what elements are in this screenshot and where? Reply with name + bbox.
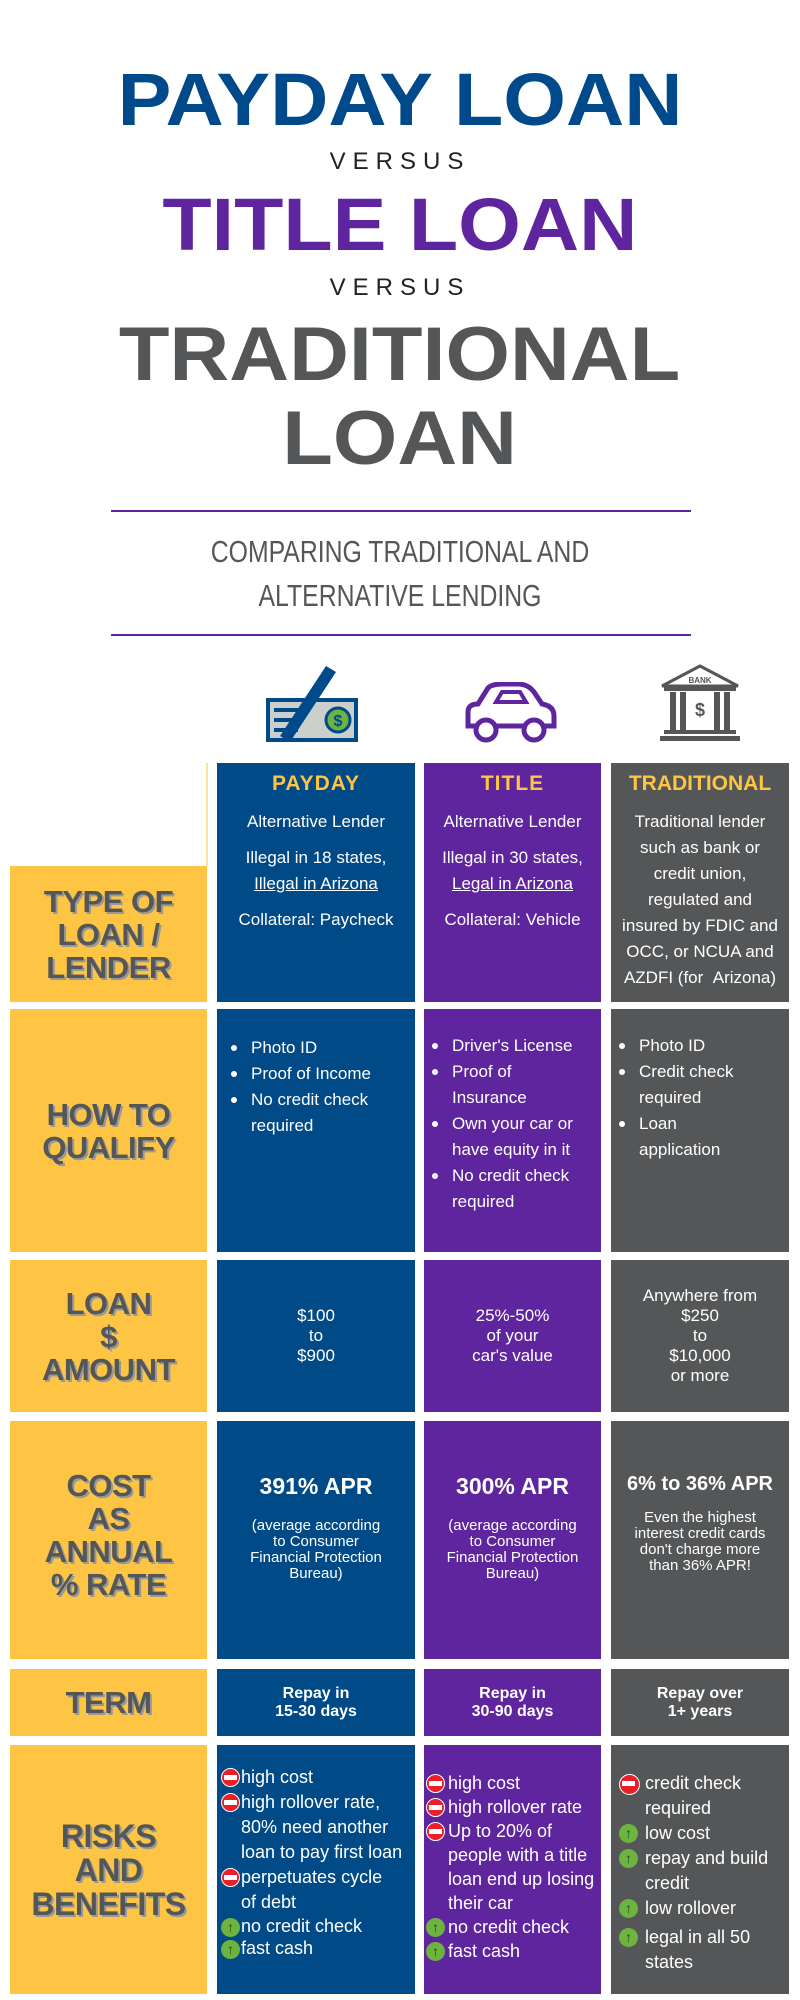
row label: loan amount: $ xyxy=(100,1318,117,1354)
panel: traditional term: 1+ years xyxy=(668,1702,732,1720)
panel: payday type: PAYDAY xyxy=(272,772,360,795)
row label: how to qualify: QUALIFY xyxy=(42,1130,175,1164)
row label: how to qualify: HOW TO xyxy=(47,1096,170,1132)
panel: traditional qualify: application xyxy=(639,1140,720,1159)
panel: payday cost: to Consumer xyxy=(273,1533,359,1550)
panel: title cost xyxy=(424,1421,601,1659)
panel: traditional qualify: required xyxy=(639,1088,701,1107)
panel: payday cost: Financial Protection xyxy=(250,1549,382,1566)
panel: traditional risks: repay and build xyxy=(645,1848,768,1868)
panel: traditional risks: ↑ xyxy=(625,1929,632,1945)
panel: traditional cost: than 36% APR! xyxy=(649,1557,751,1574)
panel: traditional risks: credit xyxy=(645,1873,689,1893)
panel: title type: Illegal in 30 states, xyxy=(442,848,583,867)
panel: payday qualify: required xyxy=(251,1116,313,1135)
panel: payday cost: Bureau) xyxy=(289,1565,343,1582)
panel: payday amount: $100 xyxy=(297,1306,335,1325)
panel: payday risks xyxy=(217,1745,415,1994)
panel: title risks: loan end up losing xyxy=(448,1869,594,1889)
panel: traditional type: regulated and xyxy=(648,890,752,909)
panel: title qualify: Insurance xyxy=(452,1088,527,1107)
panel: title type: TITLE xyxy=(481,772,544,795)
panel: payday amount: $900 xyxy=(297,1346,335,1365)
panel: traditional cost xyxy=(611,1421,789,1659)
panel: traditional type: AZDFI (for Arizona) xyxy=(624,968,776,987)
panel: title qualify: Proof of xyxy=(452,1062,512,1081)
panel: payday risks: no credit check xyxy=(241,1916,362,1936)
versus 1: VERSUS xyxy=(330,148,470,175)
panel: title amount: 25%-50% xyxy=(476,1306,549,1325)
panel: payday cost: (average according xyxy=(252,1517,380,1534)
panel: title risks: high cost xyxy=(448,1773,520,1793)
panel: title cost: (average according xyxy=(448,1517,577,1534)
panel: payday amount xyxy=(217,1260,415,1412)
panel: traditional qualify: Photo ID xyxy=(639,1036,705,1055)
panel: title risks: no credit check xyxy=(448,1917,569,1937)
panel: payday risks: high cost xyxy=(241,1767,313,1787)
icon: check and pen xyxy=(266,666,358,742)
panel: payday type: Illegal in Arizona xyxy=(254,874,378,893)
panel: payday risks: of debt xyxy=(241,1892,296,1912)
panel: payday risks: ↑ xyxy=(227,1941,234,1957)
panel: traditional type: such as bank or xyxy=(640,838,760,857)
panel: payday term: 15-30 days xyxy=(275,1702,357,1720)
panel: payday qualify: Proof of Income xyxy=(251,1064,371,1083)
row label: loan amount: AMOUNT xyxy=(42,1352,175,1386)
panel: title cost: Financial Protection xyxy=(447,1549,578,1566)
title: traditional loan xyxy=(119,312,681,481)
panel: title type: Legal in Arizona xyxy=(452,874,573,893)
panel: payday type: Illegal in 18 states, xyxy=(246,848,386,867)
title: payday loan: PAYDAY LOAN xyxy=(118,58,682,141)
row label: cost: AS xyxy=(87,1501,130,1536)
panel: traditional risks: required xyxy=(645,1798,711,1818)
panel: traditional type xyxy=(611,763,789,1002)
panel: payday risks: loan to pay first loan xyxy=(241,1842,402,1862)
row label: risks and benefits: AND xyxy=(75,1852,142,1888)
panel: traditional amount: or more xyxy=(671,1366,729,1385)
row label: term xyxy=(10,1669,207,1736)
subtitle: ALTERNATIVE LENDING xyxy=(259,578,541,613)
row label: cost: COST xyxy=(66,1468,151,1503)
row label: type of loan: TYPE OF xyxy=(44,884,173,918)
panel: title risks: high rollover rate xyxy=(448,1797,582,1817)
panel: title amount xyxy=(424,1260,601,1412)
panel: payday term xyxy=(217,1669,415,1736)
subtitle xyxy=(211,534,589,613)
panel: payday type: Alternative Lender xyxy=(247,812,385,831)
panel: traditional qualify: Loan xyxy=(639,1114,677,1133)
panel: title cost: 300% APR xyxy=(456,1473,569,1499)
row label: loan amount xyxy=(10,1260,207,1412)
panel: traditional type: insured by FDIC and xyxy=(622,916,778,935)
panel: title risks: their car xyxy=(448,1893,513,1913)
panel: traditional term: Repay over xyxy=(657,1684,743,1702)
panel: title term: 30-90 days xyxy=(472,1702,553,1720)
icon: bank xyxy=(660,664,740,741)
panel: traditional risks: states xyxy=(645,1952,693,1972)
panel: traditional risks: legal in all 50 xyxy=(645,1927,750,1947)
panel: title risks: Up to 20% of xyxy=(448,1821,552,1841)
panel: traditional risks: ↑ xyxy=(625,1825,632,1841)
panel: title qualify: Own your car or xyxy=(452,1114,573,1133)
panel: title risks: fast cash xyxy=(448,1941,520,1961)
title: traditional loan: LOAN xyxy=(283,396,517,481)
panel: traditional cost: interest credit cards xyxy=(635,1525,765,1542)
panel: traditional cost: Even the highest xyxy=(644,1509,756,1526)
panel: traditional type: OCC, or NCUA and xyxy=(626,942,774,961)
panel: title qualify: required xyxy=(452,1192,514,1211)
panel: traditional type: TRADITIONAL xyxy=(629,772,771,795)
panel: title type: Collateral: Vehicle xyxy=(444,910,581,929)
icon: bank: BANK xyxy=(688,676,712,685)
panel: traditional amount: $250 xyxy=(681,1306,719,1325)
panel: payday type: Collateral: Paycheck xyxy=(239,910,393,929)
subtitle: COMPARING TRADITIONAL AND xyxy=(211,534,589,569)
panel: traditional qualify: Credit check xyxy=(639,1062,733,1081)
panel: title risks: ↑ xyxy=(432,1919,439,1935)
row label: cost: % RATE xyxy=(51,1567,166,1602)
panel: title qualify: No credit check xyxy=(452,1166,569,1185)
panel: traditional risks: ↑ xyxy=(625,1850,632,1866)
panel: traditional risks xyxy=(611,1745,789,1994)
row label: cost: ANNUAL xyxy=(45,1534,172,1569)
panel: title type: Alternative Lender xyxy=(444,812,581,831)
panel: payday amount: to xyxy=(309,1326,323,1345)
panel: title qualify: Driver's License xyxy=(452,1036,572,1055)
panel: title amount: car's value xyxy=(472,1346,553,1365)
panel: title type xyxy=(424,763,601,1002)
panel: traditional amount: to xyxy=(693,1326,707,1345)
panel: title cost: Bureau) xyxy=(486,1565,539,1582)
row label: term: TERM xyxy=(66,1685,151,1720)
panel: payday qualify: No credit check xyxy=(251,1090,368,1109)
panel: traditional risks: ↑ xyxy=(625,1900,632,1916)
row label: how to qualify xyxy=(10,1009,207,1252)
panel: payday risks: perpetuates cycle xyxy=(241,1867,382,1887)
panel: payday qualify: Photo ID xyxy=(251,1038,317,1057)
panel: title qualify: have equity in it xyxy=(452,1140,570,1159)
panel: title term: Repay in xyxy=(479,1684,546,1702)
panel: payday risks: fast cash xyxy=(241,1938,313,1958)
panel: traditional cost: don't charge more xyxy=(640,1541,760,1558)
panel: title qualify xyxy=(424,1009,601,1252)
panel: traditional type: credit union, xyxy=(654,864,746,883)
panel: traditional amount xyxy=(611,1260,789,1412)
versus 2: VERSUS xyxy=(330,274,470,301)
panel: traditional term xyxy=(611,1669,789,1736)
panel: title amount: of your xyxy=(486,1326,538,1345)
panel: payday cost: 391% APR xyxy=(260,1473,372,1499)
panel: payday type xyxy=(217,763,415,1002)
panel: traditional amount: Anywhere from xyxy=(643,1286,757,1305)
row label: type of loan: LENDER xyxy=(46,950,171,984)
icon: check and pen: $ xyxy=(334,713,343,730)
panel: traditional risks: low rollover xyxy=(645,1898,736,1918)
panel: payday term: Repay in xyxy=(283,1684,349,1702)
panel: traditional risks: low cost xyxy=(645,1823,710,1843)
panel: payday risks: high rollover rate, xyxy=(241,1792,380,1812)
row label: risks and benefits xyxy=(10,1745,207,1994)
icon: car xyxy=(466,682,556,742)
row label: risks and benefits: RISKS xyxy=(61,1818,156,1854)
panel: title cost: to Consumer xyxy=(470,1533,555,1550)
panel: title risks: people with a title xyxy=(448,1845,587,1865)
title: traditional loan: TRADITIONAL xyxy=(119,312,681,397)
panel: traditional amount: $10,000 xyxy=(669,1346,731,1365)
row label: risks and benefits: BENEFITS xyxy=(31,1886,186,1922)
panel: traditional risks: credit check xyxy=(645,1773,741,1793)
panel: title risks: ↑ xyxy=(432,1943,439,1959)
title: title loan: TITLE LOAN xyxy=(163,183,637,266)
panel: title risks xyxy=(424,1745,601,1994)
panel: payday qualify xyxy=(217,1009,415,1252)
row label: type of loan xyxy=(10,866,207,1002)
panel: payday risks: 80% need another xyxy=(241,1817,388,1837)
icon: bank: $ xyxy=(695,700,705,720)
panel: title term xyxy=(424,1669,601,1736)
panel: traditional cost: 6% to 36% APR xyxy=(627,1473,773,1495)
panel: payday cost xyxy=(217,1421,415,1659)
row label: cost xyxy=(10,1421,207,1659)
row label: type of loan: LOAN / xyxy=(57,916,160,952)
panel: payday risks: ↑ xyxy=(227,1919,234,1935)
row label: loan amount: LOAN xyxy=(66,1286,151,1320)
panel: traditional qualify xyxy=(611,1009,789,1252)
panel: traditional type: Traditional lender xyxy=(635,812,765,831)
